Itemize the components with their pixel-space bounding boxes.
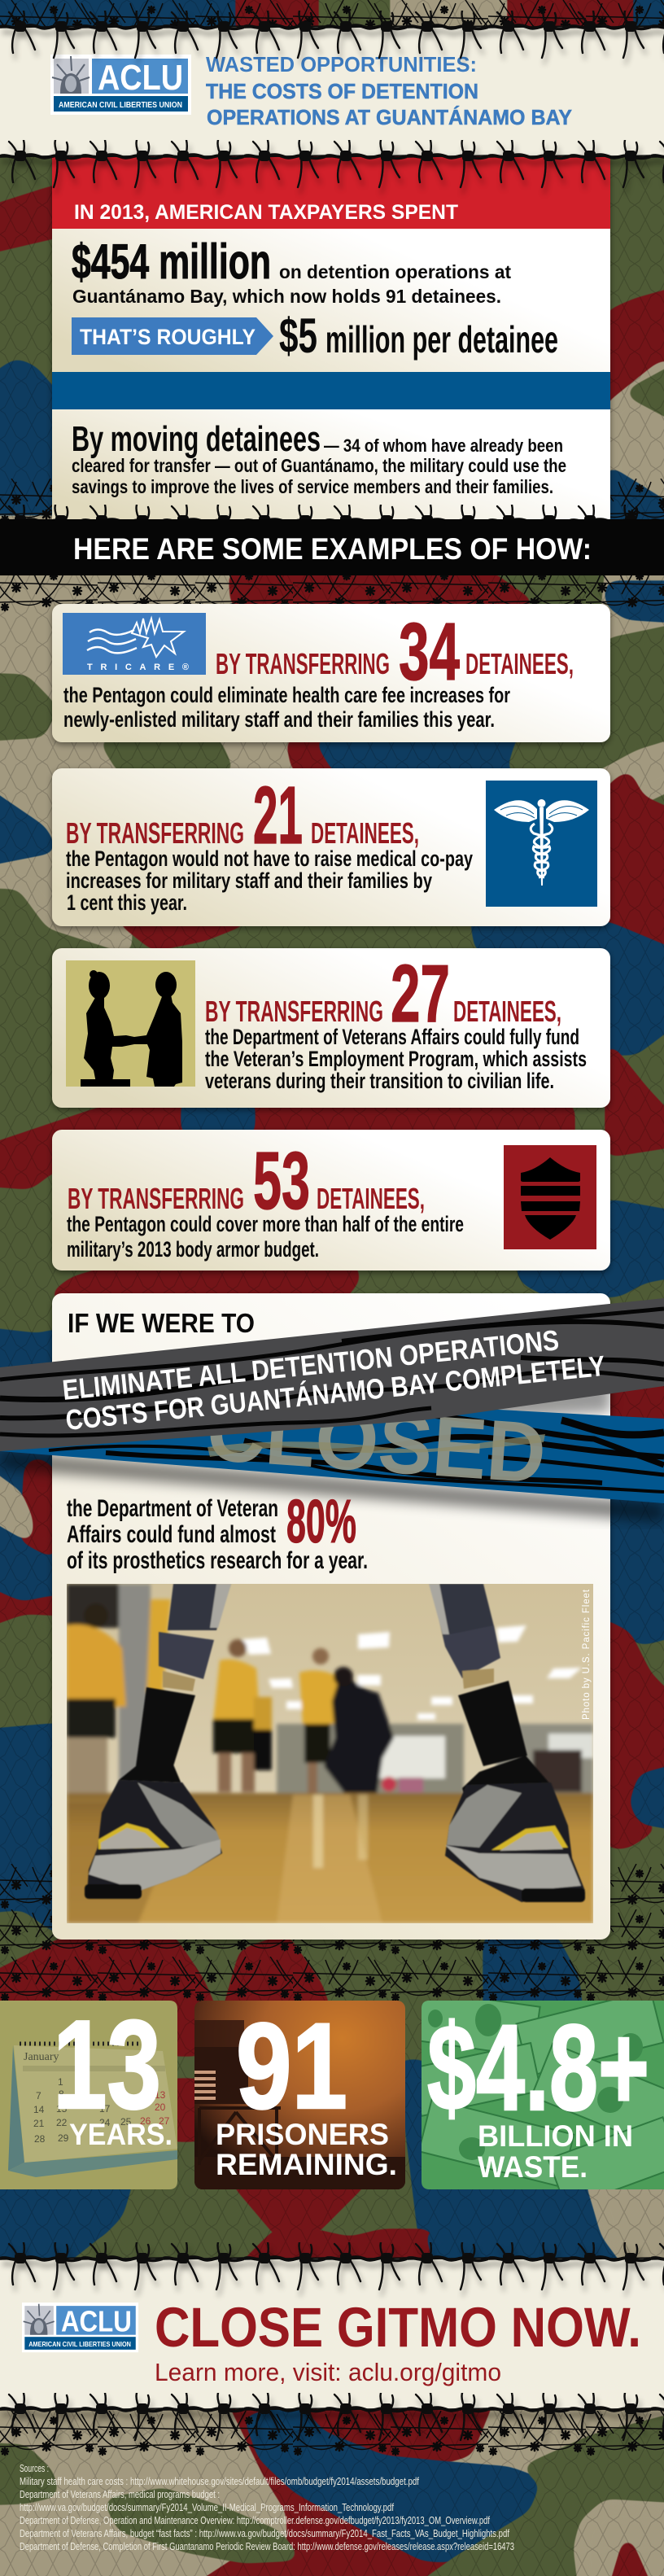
stat: 13 years: 20	[155, 2101, 166, 2113]
stat: 13 years: 28	[34, 2133, 46, 2145]
photo credit: Photo by U.S. Pacific Fleet	[582, 1589, 592, 1720]
card: 53 detainees: DETAINEES,	[317, 1182, 425, 1215]
icon: TRICARE logo	[63, 613, 206, 675]
moving detainees text: — 34 of whom have already been	[324, 435, 563, 456]
stat: 91 prisoners remaining: REMAINING.	[216, 2148, 397, 2181]
stat: $4.8+ billion in waste: BILLION IN	[478, 2119, 633, 2153]
stat: 91 prisoners remaining: PRISONERS	[216, 2118, 389, 2151]
ACLU logo: ACLU	[98, 58, 183, 98]
eliminate tape	[0, 1298, 664, 1451]
card: 53 detainees: BY TRANSFERRING	[68, 1182, 244, 1215]
title: WASTED OPPORTUNITIES:	[206, 52, 477, 77]
black banner: HERE ARE SOME EXAMPLES OF HOW:	[73, 532, 592, 566]
spending figures: $5	[279, 308, 317, 363]
sources: Military staff health care costs : http://www.whitehouse.gov/sites/default/files/omb/budget/fy2014/assets/budget.pdf	[20, 2476, 419, 2487]
card: 21 detainees: DETAINEES,	[311, 816, 419, 850]
stat: 13 years: 15	[56, 2103, 68, 2115]
card: 53 detainees: the Pentagon could cover more than half of the entire	[67, 1212, 464, 1236]
moving detainees text: cleared for transfer — out of Guantánamo, the military could use the	[72, 455, 566, 476]
card: 53 detainees	[52, 1130, 610, 1271]
stat: 13 years: 13	[155, 2089, 166, 2101]
card: 34 detainees: newly-enlisted military staff and their families this year.	[63, 707, 495, 732]
stat: 13 years: 27	[159, 2115, 170, 2127]
card: eliminate all costs	[0, 1293, 664, 1940]
veterans text: 80%	[286, 1487, 356, 1555]
stat: 13 years: YEARS.	[69, 2118, 173, 2151]
black banner	[0, 505, 664, 575]
spending figures	[52, 229, 610, 372]
stat: 13 years: 26	[140, 2115, 151, 2127]
card: 34 detainees: 34	[399, 606, 460, 698]
sources: Sources :	[20, 2463, 49, 2474]
card: 21 detainees: BY TRANSFERRING	[66, 816, 244, 850]
moving detainees text: By moving detainees	[72, 419, 321, 459]
sources	[20, 2463, 514, 2552]
learn more link text: Learn more, visit: aclu.org/gitmo	[155, 2358, 501, 2386]
icon: TRICARE logo: TRICARE®	[87, 663, 189, 672]
photo: prosthetic legs in gym	[67, 1584, 593, 1923]
veterans text	[67, 1487, 368, 1574]
veterans text: Affairs could fund almost	[67, 1521, 276, 1548]
closed tape	[0, 1383, 664, 1503]
card: 27 detainees: 27	[391, 948, 450, 1039]
sources: Department of Defense, Operation and Maintenance Overview: http://comptroller.defense.gov/defbudget/fy2013/fy2013_OM_Overview.pdf	[20, 2515, 490, 2526]
ACLU logo footer	[22, 2303, 138, 2352]
title: OPERATIONS AT GUANTÁNAMO BAY	[207, 105, 572, 129]
title	[206, 52, 572, 129]
veterans text: of its prosthetics research for a year.	[67, 1547, 368, 1574]
stat: $4.8+ billion in waste	[422, 2001, 664, 2189]
title: THE COSTS OF DETENTION	[206, 79, 478, 103]
card: 34 detainees	[52, 604, 610, 742]
heading: if we were to: IF WE WERE TO	[68, 1308, 255, 1338]
card: 34 detainees: BY TRANSFERRING	[216, 647, 390, 680]
card: 21 detainees: 1 cent this year.	[67, 890, 187, 915]
ACLU logo footer: ACLU	[61, 2305, 132, 2338]
icon: caduceus	[486, 781, 597, 907]
veterans text: the Department of Veteran	[67, 1495, 278, 1522]
stat: 13 years	[0, 1994, 177, 2189]
icon: body armor shield	[504, 1145, 596, 1249]
header band	[0, 27, 664, 156]
card: 27 detainees: BY TRANSFERRING	[205, 995, 383, 1028]
spending figures: Guantánamo Bay, which now holds 91 detainees.	[72, 286, 501, 307]
ACLU logo	[50, 55, 191, 115]
stat: 13 years: 8	[59, 2088, 64, 2100]
card: 27 detainees	[52, 948, 610, 1108]
prosthetic leg left	[85, 1584, 231, 1899]
stat: 13 years: 17	[99, 2103, 111, 2115]
card: 21 detainees	[52, 768, 610, 926]
stat: 13 years: 13	[53, 1994, 161, 2135]
stat: 91 prisoners remaining: 91	[236, 1997, 347, 2134]
stat: $4.8+ billion in waste: WASTE.	[478, 2150, 588, 2184]
closed tape: CLOSED	[203, 1383, 549, 1502]
prosthetic leg right	[429, 1584, 585, 1902]
stat: 13 years: 1	[58, 2076, 63, 2088]
spending figures: on detention operations at	[279, 261, 511, 282]
icon: handshake silhouettes	[66, 960, 195, 1087]
card: 34 detainees: DETAINEES,	[465, 647, 574, 680]
ACLU logo footer: AMERICAN CIVIL LIBERTIES UNION	[28, 2341, 131, 2348]
stat: 91 prisoners remaining	[194, 1997, 405, 2189]
stat: 13 years: 24	[99, 2117, 111, 2128]
moving detainees text	[52, 409, 610, 523]
footer band	[0, 2259, 664, 2409]
spending figures: $454 million	[72, 234, 271, 289]
eliminate tape: ELIMINATE ALL DETENTION OPERATIONS	[61, 1324, 561, 1406]
sources: http://www.va.gov/budget/docs/summary/Fy2014_Volume_II-Medical_Programs_Information_Technology.pdf	[20, 2502, 394, 2513]
card: 53 detainees: 53	[253, 1135, 310, 1227]
card: 21 detainees: increases for military staff and their families by	[66, 868, 432, 893]
stat: 13 years: 7	[36, 2090, 42, 2101]
sources: Department of Veterans Affairs, budget “fast facts” : http://www.va.gov/budget/docs/summary/Fy2014_Fast_Facts_VAs_Budget_Highlights.pdf	[20, 2528, 509, 2539]
moving detainees text: savings to improve the lives of service members and their families.	[72, 476, 553, 497]
arrow: that's roughly	[72, 317, 273, 355]
stat: 13 years: 29	[58, 2132, 69, 2144]
stat: 13 years: 25	[120, 2116, 132, 2128]
card: 21 detainees: 21	[253, 770, 303, 861]
card: 27 detainees: DETAINEES,	[453, 995, 561, 1028]
stat: 13 years: January	[24, 2051, 59, 2063]
card: 21 detainees: the Pentagon would not have to raise medical co-pay	[66, 846, 473, 871]
stat: 13 years: 22	[56, 2117, 68, 2128]
red heading bar	[52, 156, 610, 229]
stat: 13 years: 14	[33, 2104, 45, 2115]
stat: 13 years: 21	[33, 2118, 45, 2129]
red heading bar: IN 2013, AMERICAN TAXPAYERS SPENT	[74, 201, 458, 224]
ACLU logo: AMERICAN CIVIL LIBERTIES UNION	[59, 101, 182, 110]
card: 34 detainees: the Pentagon could eliminate health care fee increases for	[63, 683, 510, 707]
card: 53 detainees: military’s 2013 body armor budget.	[67, 1237, 319, 1262]
arrow: that's roughly: THAT’S ROUGHLY	[80, 325, 256, 349]
sources: Department of Veterans Affairs, medical programs budget :	[20, 2489, 220, 2500]
sources: Department of Defense, Completion of First Guantanamo Periodic Review Board: http://www.defense.gov/releases/release.aspx?releaseid=16473	[20, 2541, 514, 2552]
panel: spending summary	[52, 156, 610, 523]
